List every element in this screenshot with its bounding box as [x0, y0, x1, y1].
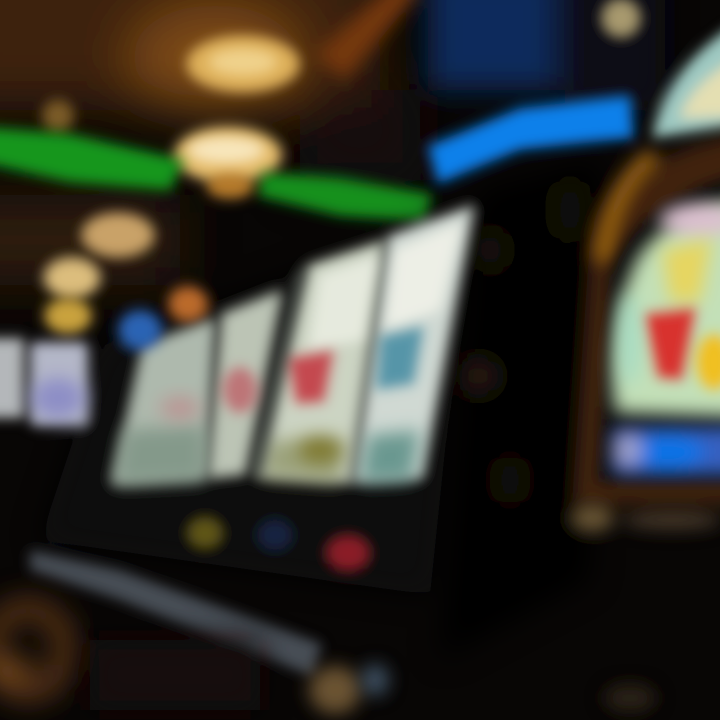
top blue light on slot: [118, 310, 162, 350]
lamp: lower stem: [206, 173, 254, 199]
lamp: top right: [602, 0, 640, 37]
lamp: upper: [187, 36, 299, 92]
screen: pale green side: [620, 294, 640, 386]
reel divider: [250, 265, 308, 476]
right machine blue panel: [612, 428, 720, 474]
reel 4 lower tint: [360, 430, 420, 482]
left screen: lilac lower: [32, 378, 84, 418]
lamp: middle highlight: [188, 137, 264, 163]
right machine colourful screen: [612, 195, 720, 418]
right machine cabinet frame: [572, 126, 720, 505]
pillar: brown glints: [458, 180, 582, 504]
console front rail: [30, 550, 322, 676]
right machine inner dark: [598, 165, 720, 482]
floor: brown stool left: [0, 608, 66, 692]
left screen: center: [30, 342, 88, 426]
ceiling beam: orange diagonal: [315, 0, 430, 80]
button: blue dim: [257, 519, 293, 551]
floor: dim brown: [90, 640, 260, 710]
symbol: olive: [298, 436, 342, 464]
frame: gold edge: [602, 155, 655, 262]
left distant machine: [0, 298, 92, 426]
floor: right dim glint: [604, 684, 656, 712]
symbol: red reel 3: [288, 350, 334, 404]
green neon band: left: [0, 126, 185, 190]
lower console buttons: [187, 517, 370, 571]
blue neon band: [428, 96, 634, 184]
reel 4 highlight: [385, 222, 462, 330]
ceiling: warm brown glow: [0, 0, 420, 285]
green neon band: right: [258, 172, 432, 222]
slot reels: [112, 205, 474, 484]
reel 1: [112, 318, 215, 484]
reel 4: [354, 205, 474, 482]
screen: red symbol: [644, 308, 696, 380]
reel 2: [208, 290, 282, 478]
top orange light on slot: [168, 286, 208, 322]
reel 3 highlight: [308, 255, 380, 350]
center slot machine body: [40, 210, 470, 595]
screen: orange symbol: [696, 334, 720, 390]
symbol: pale red reel 1: [160, 396, 200, 420]
reel 3: [256, 240, 385, 482]
reel divider 2: [350, 240, 386, 480]
reel 3 lower tint: [262, 440, 345, 482]
reel 1 lower tint: [115, 425, 205, 484]
lamp: small top: [42, 100, 74, 132]
lamp: middle: [174, 127, 282, 183]
lamp: upper highlight: [209, 49, 277, 75]
left screen: pale: [0, 338, 24, 418]
lamp: far: [82, 213, 154, 257]
symbol: teal square: [376, 326, 424, 390]
screen base: [612, 195, 720, 418]
dark cabinet pillar: [440, 160, 600, 660]
rail: tan foot: [309, 666, 361, 714]
ceiling lamps: [42, 0, 640, 298]
symbol: pink reel 2: [223, 367, 257, 413]
button: yellow: [187, 517, 223, 549]
lamp: farthest: [44, 258, 100, 298]
right machine lower lights: [570, 504, 720, 532]
button: red: [326, 535, 370, 571]
ceiling: dark blue canopy: [428, 0, 665, 110]
screen: pink top: [660, 204, 720, 236]
left yellow top: [44, 298, 92, 334]
right arch top panel: [652, 0, 720, 138]
rail: blue glint: [361, 664, 389, 696]
screen: yellow symbol: [662, 238, 712, 302]
